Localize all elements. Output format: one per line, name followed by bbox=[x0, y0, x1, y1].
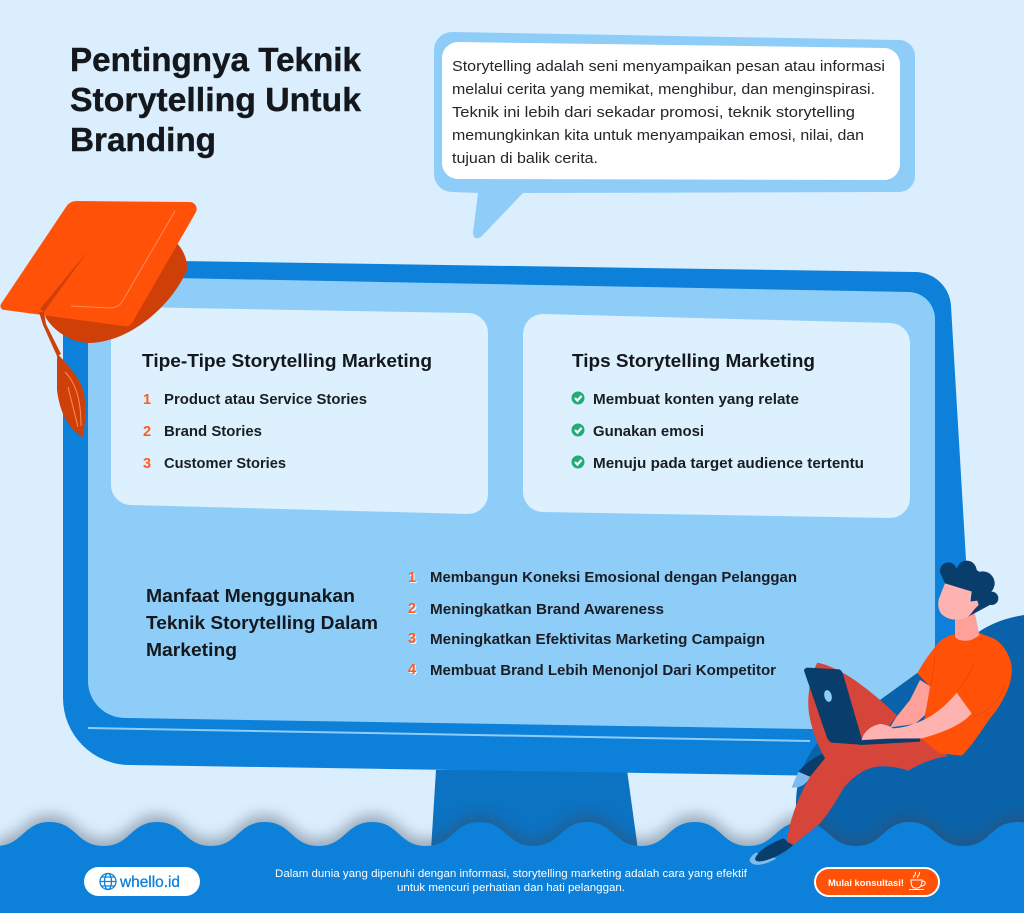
near arm bbox=[862, 693, 972, 740]
face bbox=[938, 583, 979, 620]
panel: tips storytelling marketing: Gunakan emosi bbox=[593, 424, 704, 440]
panel: tips storytelling marketing: Membuat konten yang relate bbox=[593, 392, 799, 408]
list: manfaat: 4 bbox=[409, 663, 417, 679]
icon: coffee cup bbox=[909, 872, 925, 890]
icon: check bbox=[572, 456, 584, 468]
panel: tips storytelling marketing: Tips Storytelling Marketing bbox=[572, 351, 815, 371]
wave shadow bbox=[0, 815, 1024, 906]
title bbox=[70, 41, 362, 158]
panel: tipe-tipe storytelling marketing: Customer Stories bbox=[164, 456, 286, 472]
list: manfaat bbox=[408, 570, 797, 679]
person with laptop bbox=[749, 561, 1012, 865]
speech bubble: storytelling definition: tujuan di balik cerita. bbox=[452, 151, 598, 167]
laptop bbox=[804, 668, 862, 745]
speech bubble: storytelling definition: Storytelling adalah seni menyampaikan pesan atau informasi bbox=[452, 59, 885, 75]
panel: tips storytelling marketing: Menuju pada target audience tertentu bbox=[593, 456, 864, 472]
far arm bbox=[890, 680, 931, 727]
cap base bbox=[45, 243, 187, 343]
panel: tipe-tipe storytelling marketing: 1 bbox=[143, 392, 151, 408]
monitor stand bbox=[431, 770, 638, 850]
panel: tipe-tipe storytelling marketing: Product atau Service Stories bbox=[164, 392, 367, 408]
footer: closing text: untuk mencuri perhatian dan hati pelanggan. bbox=[397, 882, 625, 894]
speech bubble: storytelling definition: Teknik ini lebih dari sekadar promosi, teknik storytelling bbox=[452, 105, 855, 121]
footer: closing text bbox=[275, 868, 748, 894]
back leg and sock bbox=[792, 772, 812, 788]
speech bubble: storytelling definition: melalui cerita yang memikat, menghibur, dan menginspirasi. bbox=[452, 82, 875, 98]
list: manfaat: 2 bbox=[409, 602, 417, 618]
shoe bbox=[749, 853, 777, 865]
panel: tipe-tipe storytelling marketing bbox=[111, 307, 488, 514]
footer: logo pill: whello.id bbox=[119, 874, 180, 891]
trousers bbox=[787, 663, 948, 845]
speech bubble: storytelling definition bbox=[434, 32, 915, 238]
list: manfaat: 1 bbox=[409, 571, 417, 587]
list: manfaat: Membuat Brand Lebih Menonjol Dari Kompetitor bbox=[430, 663, 776, 679]
title: Pentingnya Teknik bbox=[70, 41, 362, 78]
title: Storytelling Untuk bbox=[70, 81, 362, 118]
panel: tips storytelling marketing bbox=[523, 314, 910, 518]
icon: check bbox=[572, 424, 584, 436]
list: manfaat: Meningkatkan Efektivitas Marketing Campaign bbox=[430, 632, 765, 648]
panel: tipe-tipe storytelling marketing: 2 bbox=[143, 424, 151, 440]
footer: call to action button: Mulai konsultasi! bbox=[828, 878, 904, 889]
list: manfaat: 3 bbox=[409, 632, 417, 648]
hair bbox=[940, 561, 998, 617]
list: manfaat: Meningkatkan Brand Awareness bbox=[430, 602, 664, 618]
footer: call to action button bbox=[815, 868, 939, 896]
panel: tipe-tipe storytelling marketing: 3 bbox=[143, 456, 151, 472]
cap board bbox=[0, 201, 197, 326]
tassel bbox=[39, 312, 61, 356]
panel: tipe-tipe storytelling marketing: Brand Stories bbox=[164, 424, 262, 440]
graduation cap bbox=[0, 201, 197, 437]
monitor bbox=[63, 260, 966, 778]
list: manfaat: 2 bbox=[408, 601, 416, 617]
icon: globe bbox=[100, 874, 116, 890]
title: Branding bbox=[70, 121, 216, 158]
shirt bbox=[917, 633, 1012, 756]
speech bubble: storytelling definition: memungkinkan kita untuk menyampaikan emosi, nilai, dan bbox=[452, 128, 864, 144]
bean bag seat bbox=[796, 615, 1024, 850]
icon: check bbox=[572, 392, 584, 404]
heading: manfaat: Manfaat Menggunakan bbox=[146, 586, 355, 606]
list: manfaat: 4 bbox=[408, 662, 416, 678]
panel: tipe-tipe storytelling marketing: Tipe-Tipe Storytelling Marketing bbox=[142, 351, 432, 371]
list: manfaat: Membangun Koneksi Emosional dengan Pelanggan bbox=[430, 570, 797, 586]
list: manfaat: 1 bbox=[408, 570, 416, 586]
heading: manfaat bbox=[146, 586, 378, 660]
footer: logo pill bbox=[84, 867, 200, 896]
footer wave bbox=[0, 822, 1024, 913]
heading: manfaat: Marketing bbox=[146, 640, 237, 660]
heading: manfaat: Teknik Storytelling Dalam bbox=[146, 613, 378, 633]
footer: closing text: Dalam dunia yang dipenuhi dengan informasi, storytelling marketing adalah cara yang efektif bbox=[275, 868, 748, 880]
list: manfaat: 3 bbox=[408, 631, 416, 647]
neck bbox=[955, 613, 979, 641]
